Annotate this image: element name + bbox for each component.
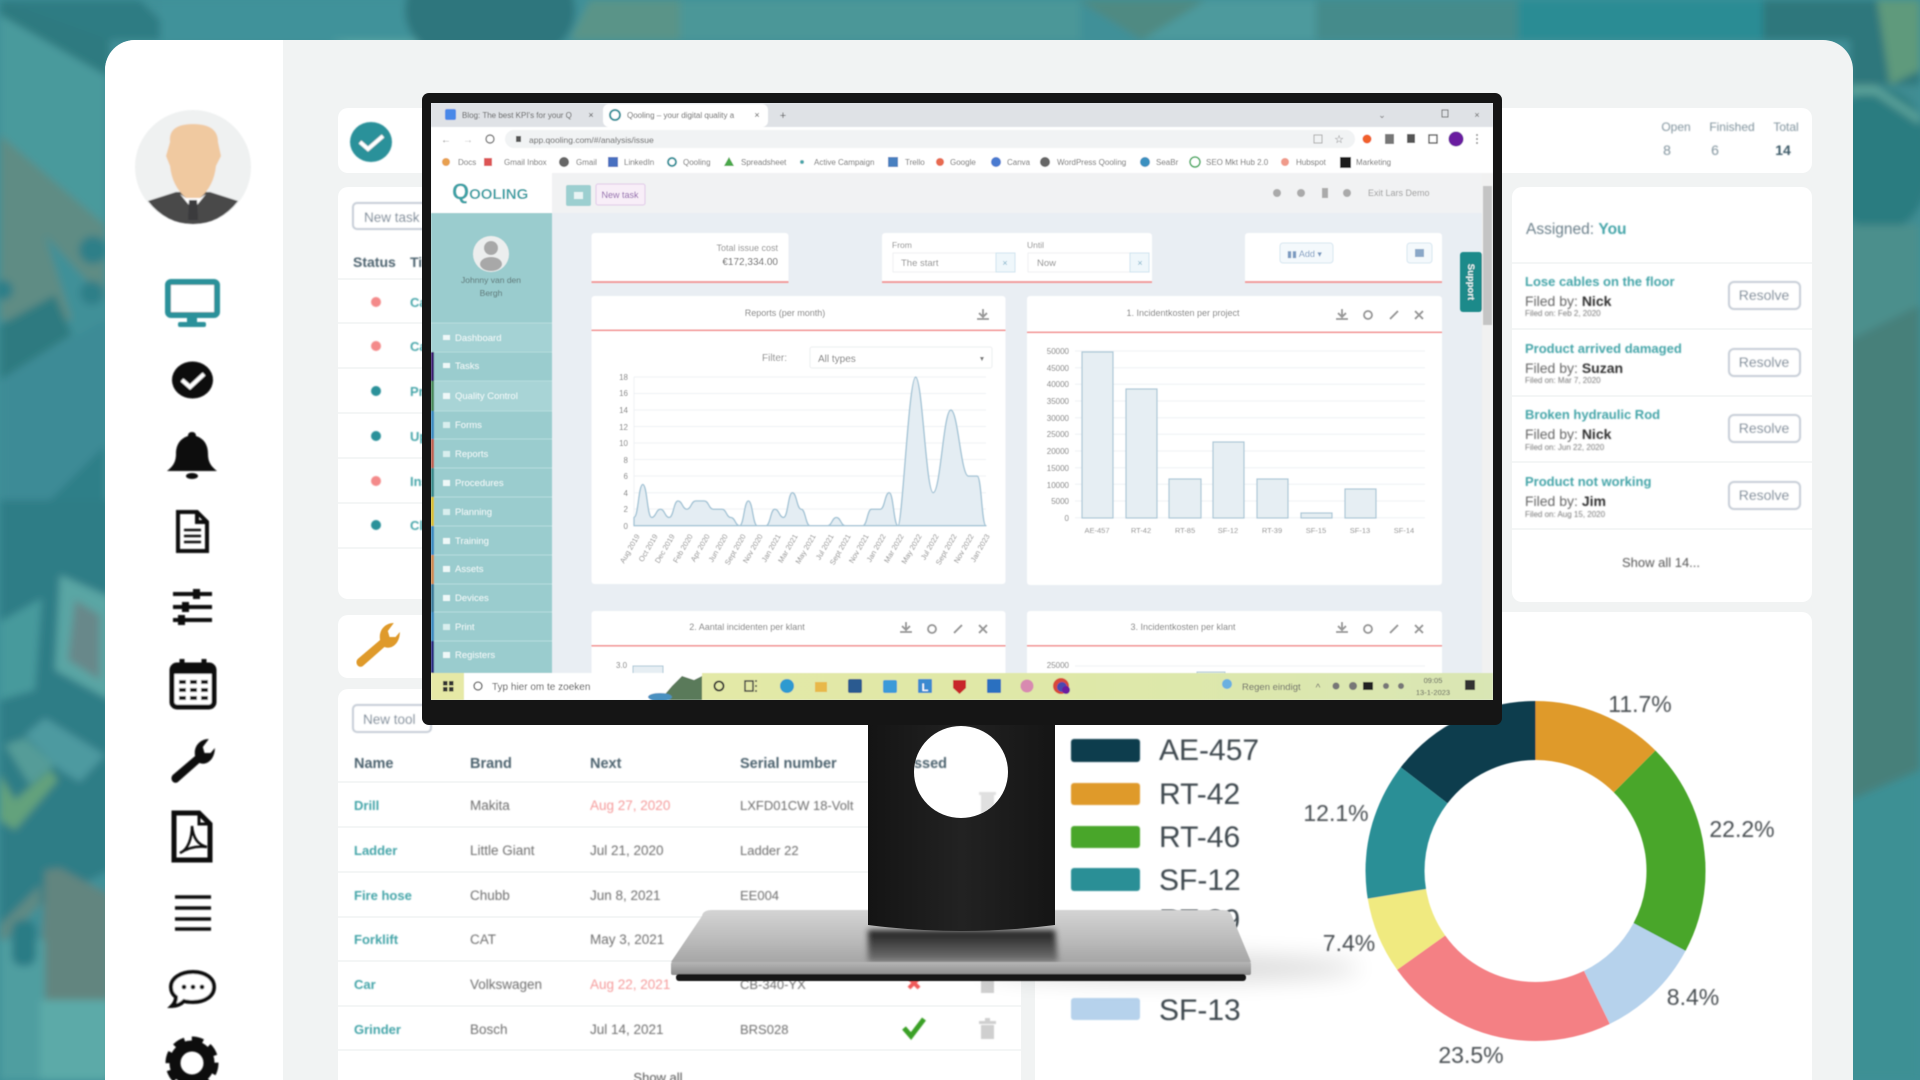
date filter card	[882, 233, 1152, 283]
browser tab bar: ⌄	[1378, 110, 1386, 120]
donut percentages: 8.4%	[1667, 984, 1719, 1010]
new task button: New task	[364, 210, 420, 225]
line chart: 18	[619, 373, 629, 382]
line chart: 12	[619, 423, 629, 432]
issue 3: Resolve	[1739, 420, 1789, 436]
chart panel: costs per client: 3. Incidentkosten per klant	[1130, 622, 1236, 632]
windows taskbar: L	[922, 682, 929, 694]
sidebar avatar	[135, 110, 251, 224]
bar chart: SF-14	[1394, 526, 1414, 535]
app sidebar: Planning	[455, 507, 492, 518]
next dates: Aug 27, 2020	[590, 798, 670, 813]
header actions	[1273, 188, 1351, 198]
task counters: 6	[1711, 142, 1719, 158]
icon: task check	[350, 122, 392, 162]
app sidebar: Training	[455, 536, 489, 547]
tool names	[354, 798, 412, 1037]
panel: tools table	[338, 689, 1021, 1080]
app header: Exit Lars Demo	[1368, 188, 1430, 198]
issue 4: Filed on: Aug 15, 2020	[1525, 510, 1606, 519]
line chart: Oct 2019	[637, 532, 660, 563]
bar chart: 10000	[1047, 481, 1070, 490]
line chart: 6	[624, 472, 629, 481]
legend	[1071, 734, 1259, 1027]
icon: wrench	[171, 739, 215, 783]
tool brands: Little Giant	[470, 843, 535, 858]
date filter card: ×	[1002, 258, 1008, 268]
legend: SF-12	[1159, 864, 1241, 897]
windows taskbar: 13-1-2023	[1416, 688, 1450, 697]
total cost card: €172,334.00	[722, 257, 778, 268]
donut percentages: 11.7%	[1608, 691, 1672, 717]
browser tab bar: Qooling – your digital quality a	[627, 111, 735, 120]
chart panel: costs per project: 1. Incidentkosten per project	[1126, 308, 1240, 318]
bar chart: AE-457	[1084, 526, 1110, 535]
tools column headers: Brand	[470, 756, 512, 772]
issue 3: Filed on: Jun 22, 2020	[1525, 443, 1605, 452]
legend: RT-42	[1159, 778, 1240, 811]
panel: icon sidebar	[105, 40, 283, 1080]
serial numbers: BRS028	[740, 1022, 788, 1037]
line chart: Nov 2021	[847, 532, 871, 565]
bar chart: RT-42	[1131, 526, 1151, 535]
bar chart: 20000	[1047, 447, 1070, 456]
next dates: Jun 8, 2021	[590, 888, 661, 903]
browser bookmarks bar: Qooling	[683, 158, 711, 167]
donut	[1395, 730, 1676, 1012]
new task button	[353, 203, 463, 229]
app sidebar: Quality Control	[455, 391, 518, 402]
tool brands: Volkswagen	[470, 977, 542, 992]
tool brands: Makita	[470, 798, 510, 813]
task rows: Cables	[410, 295, 453, 310]
new tool button	[353, 705, 431, 732]
icon: chat	[171, 972, 214, 1006]
browser bookmarks bar: Docs	[458, 158, 476, 167]
browser tab bar: ×	[1474, 110, 1480, 120]
task rows: Update	[410, 429, 454, 444]
line chart: Mar 2022	[882, 532, 906, 564]
chart panel: reports per month	[592, 296, 1006, 584]
issue 4: Filed by: Jim	[1525, 493, 1606, 509]
app header: New task	[601, 190, 639, 200]
bar chart: 35000	[1047, 397, 1070, 406]
task counters: Open	[1661, 120, 1691, 134]
base shadow	[980, 956, 1360, 980]
stand base	[671, 910, 1251, 981]
windows taskbar	[431, 673, 1493, 701]
bar chart: SF-12	[1218, 526, 1238, 535]
browser tab bar	[431, 103, 1493, 127]
add widget card	[1245, 233, 1442, 283]
date filter card: From	[892, 240, 912, 250]
serial numbers: EE004	[740, 888, 779, 903]
next dates	[590, 798, 670, 1037]
bar chart: SF-13	[1350, 526, 1370, 535]
tool names: Forklift	[354, 932, 399, 947]
browser bookmarks bar: Active Campaign	[814, 158, 874, 167]
app sidebar: Johnny van den	[461, 275, 521, 285]
chart panel: costs per project	[1027, 296, 1442, 585]
line chart: Jan 2023	[969, 532, 992, 564]
legend: SF-13	[1159, 994, 1241, 1027]
bar chart: 45000	[1047, 364, 1070, 373]
tool brands: CAT	[470, 932, 496, 947]
line chart: Jul 2021	[814, 532, 836, 562]
chart panel: costs per client: 25000	[1047, 661, 1070, 670]
browser bookmarks bar: WordPress Qooling	[1057, 158, 1126, 167]
hole in stand: Passed	[896, 756, 947, 772]
browser address bar: ☆	[1334, 134, 1344, 146]
app sidebar: Procedures	[455, 478, 504, 489]
scrollbar	[1481, 186, 1492, 326]
line chart: Sept 2020	[723, 532, 748, 567]
task counters: Total	[1773, 120, 1799, 134]
next dates: Aug 22, 2021	[590, 977, 670, 992]
date filter card: Until	[1027, 240, 1044, 250]
line chart: 16	[619, 389, 629, 398]
browser bookmarks bar	[431, 150, 1493, 173]
chart panel: reports per month: ▼	[979, 356, 985, 363]
issue 2: Resolve	[1739, 354, 1789, 370]
line chart: Apr 2020	[689, 532, 712, 563]
issue 1: Filed on: Feb 2, 2020	[1525, 309, 1601, 318]
bar chart: 50000	[1047, 347, 1070, 356]
tool brands: Bosch	[470, 1022, 508, 1037]
line chart: Jan 2021	[760, 532, 783, 564]
donut percentages: 12.1%	[1303, 800, 1369, 826]
line chart: 14	[619, 406, 629, 415]
icon: calendar	[172, 659, 214, 707]
line chart: 4	[624, 489, 629, 498]
donut percentages: 22.2%	[1709, 816, 1775, 842]
task counters	[1661, 120, 1799, 158]
browser tab bar: +	[780, 110, 786, 122]
issue 3	[1525, 407, 1800, 452]
task counters: 14	[1775, 142, 1791, 158]
icon: document	[178, 512, 207, 551]
browser address bar	[431, 127, 1493, 150]
app sidebar: Tasks	[455, 361, 480, 372]
tools column headers: Next	[590, 756, 622, 772]
line chart: May 2022	[899, 532, 924, 566]
date filter card: ×	[1137, 258, 1143, 268]
date filter card: The start	[901, 258, 939, 269]
line chart: Aug 2019	[618, 532, 642, 565]
issue 1: Lose cables on the floor	[1525, 274, 1675, 289]
task table header: Status	[353, 254, 396, 270]
task counters: 8	[1663, 142, 1671, 158]
app sidebar: Devices	[455, 593, 489, 604]
bar chart	[1047, 347, 1425, 535]
hole in stand	[914, 726, 1008, 818]
browser bookmarks bar: Gmail	[576, 158, 597, 167]
donut percentages: 7.4%	[1323, 930, 1375, 956]
monitor screen	[431, 103, 1493, 701]
app sidebar	[431, 213, 552, 673]
tool names: Grinder	[354, 1022, 401, 1037]
line chart: May 2021	[793, 532, 818, 566]
browser bookmarks bar: LinkedIn	[624, 158, 654, 167]
panel: donut chart	[1035, 612, 1812, 1080]
task rows: Inspect	[410, 474, 456, 489]
right strip shapes	[1850, 0, 1920, 90]
windows taskbar: Regen eindigt	[1242, 682, 1301, 693]
browser tab bar: ×	[754, 110, 760, 120]
qooling logo: QOOLING	[452, 179, 528, 204]
monitor frame	[422, 93, 1502, 725]
issue 2: Product arrived damaged	[1525, 341, 1682, 356]
chart panel: incidents per client: 2. Aantal incidenten per klant	[689, 622, 805, 632]
browser bookmarks bar: Spreadsheet	[741, 158, 787, 167]
serial numbers: LXFD01CW 18-Volt	[740, 798, 854, 813]
chart panel: incidents per client	[591, 611, 1006, 674]
line chart: 8	[624, 456, 629, 465]
donut percentages	[1303, 691, 1775, 1068]
serial numbers	[740, 798, 854, 1037]
browser tab bar: ×	[588, 110, 594, 120]
bar chart: 0	[1065, 514, 1070, 523]
tool names: Ladder	[354, 843, 397, 858]
search photo	[648, 676, 702, 701]
app sidebar: Forms	[455, 420, 482, 431]
new tool button: New tool	[363, 712, 416, 727]
total cost card: Total issue cost	[716, 243, 778, 253]
tool names: Drill	[354, 798, 379, 813]
browser bookmarks bar: Marketing	[1356, 158, 1391, 167]
bar chart: 5000	[1051, 497, 1070, 506]
bar chart: 40000	[1047, 380, 1070, 389]
chart panel: reports per month: Filter:	[762, 353, 787, 364]
show all issues: Show all 14...	[1622, 555, 1700, 570]
line chart: 0	[624, 522, 629, 531]
line chart: Mar 2021	[776, 532, 800, 564]
legend: RT-46	[1159, 821, 1240, 854]
line chart: Jun 2020	[707, 532, 730, 564]
bar chart: 30000	[1047, 414, 1070, 423]
passed status icons	[904, 978, 924, 1036]
support tab	[1460, 252, 1482, 312]
next dates: Jul 14, 2021	[590, 1022, 664, 1037]
browser bookmarks bar: Canva	[1007, 158, 1031, 167]
panel: tools header	[338, 615, 1038, 678]
issue 2: Filed on: Mar 7, 2020	[1525, 376, 1601, 385]
icon: monitor (active)	[168, 282, 217, 327]
line chart: Sept 2022	[934, 532, 959, 567]
line chart	[618, 373, 992, 567]
issue 3: Broken hydraulic Rod	[1525, 407, 1660, 422]
task rows: Product	[410, 384, 460, 399]
icon: sliders	[173, 589, 212, 625]
icon: pdf	[174, 813, 210, 860]
next dates: Jul 21, 2020	[590, 843, 664, 858]
app header	[431, 173, 1493, 213]
app sidebar: Assets	[455, 564, 484, 575]
tools column headers	[354, 756, 837, 772]
stand neck	[868, 725, 1055, 931]
new task pill	[596, 184, 645, 205]
issue 3: Filed by: Nick	[1525, 426, 1612, 442]
browser bookmarks bar: Google	[950, 158, 976, 167]
panel: tasks header	[338, 108, 1812, 173]
line chart: Feb 2020	[671, 532, 695, 564]
support tab: Support	[1465, 264, 1476, 301]
monitor stand	[671, 725, 1360, 981]
tool brands	[470, 798, 542, 1037]
top strip shapes	[0, 0, 180, 40]
line chart: Jul 2022	[919, 532, 941, 562]
task rows: Cables	[410, 339, 453, 354]
app sidebar: Print	[455, 622, 475, 633]
menu button	[566, 185, 591, 206]
total cost card	[592, 233, 788, 283]
browser bookmarks bar: SEO Mkt Hub 2.0	[1206, 158, 1269, 167]
app sidebar: Bergh	[480, 288, 503, 298]
chart panel: incidents per client: 3.0	[616, 661, 628, 670]
panel: assigned issues	[1512, 187, 1812, 602]
chart panel: reports per month: Reports (per month)	[745, 308, 825, 318]
browser tab bar: Blog: The best KPI's for your Q	[462, 111, 572, 120]
windows taskbar: ^	[1316, 683, 1321, 694]
bar chart: SF-15	[1306, 526, 1326, 535]
assigned heading: Assigned: You	[1526, 221, 1627, 238]
line chart: Nov 2020	[741, 532, 765, 565]
browser address bar: app.qooling.com/#/analysis/issue	[529, 135, 654, 145]
issue 4: Resolve	[1739, 487, 1789, 503]
app sidebar: Dashboard	[455, 333, 501, 344]
icon: orange wrench	[356, 623, 400, 667]
sidebar navigation icons	[167, 282, 217, 1080]
icon: gear	[169, 1040, 215, 1080]
line chart: 10	[619, 439, 629, 448]
issue 1: Filed by: Nick	[1525, 293, 1612, 309]
browser address bar: →	[463, 135, 473, 146]
tool brands: Chubb	[470, 888, 510, 903]
serial numbers: Ladder 22	[740, 843, 799, 858]
bar chart: 15000	[1047, 464, 1070, 473]
donut percentages: 23.5%	[1438, 1042, 1504, 1068]
issue 1	[1525, 274, 1800, 318]
issue 2: Filed by: Suzan	[1525, 360, 1623, 376]
icon: list	[175, 897, 211, 929]
issue 1: Resolve	[1739, 287, 1789, 303]
add widget card: ▮▮ Add ▾	[1287, 249, 1322, 259]
chart panel: costs per client	[1026, 611, 1442, 674]
icon: check circle	[172, 362, 213, 398]
next dates: May 3, 2021	[590, 932, 664, 947]
issue 4: Product not working	[1525, 474, 1651, 489]
task table header: Title	[410, 254, 439, 270]
legend: RT-39	[1159, 904, 1240, 937]
browser bookmarks bar: Gmail Inbox	[504, 158, 547, 167]
panel: task list	[338, 187, 1038, 599]
tool names: Fire hose	[354, 888, 412, 903]
icon: bell	[167, 432, 217, 479]
legend: AE-457	[1159, 734, 1259, 767]
chart panel: reports per month: All types	[818, 354, 856, 365]
windows taskbar: 09:05	[1424, 676, 1442, 685]
bar chart: 25000	[1047, 430, 1070, 439]
line chart: Sept 2021	[828, 532, 853, 567]
issue 4	[1525, 474, 1800, 519]
date filter card: Now	[1037, 258, 1056, 269]
serial numbers: CB-340-YX	[740, 977, 806, 992]
browser bookmarks bar: Trello	[905, 158, 925, 167]
app sidebar: Reports	[455, 449, 489, 460]
windows taskbar: Typ hier om te zoeken	[492, 682, 590, 693]
app sidebar: Registers	[455, 650, 495, 661]
task counters: Finished	[1709, 120, 1755, 134]
line chart: Jan 2022	[865, 532, 888, 564]
browser bookmarks bar: SeaBr	[1156, 158, 1179, 167]
tools column headers: Serial number	[740, 756, 837, 772]
trash icons	[979, 978, 996, 1039]
line chart: 2	[624, 505, 629, 514]
line chart: Nov 2022	[952, 532, 976, 565]
tool names: Car	[354, 977, 376, 992]
task table header	[353, 254, 439, 270]
task rows: Clean	[410, 518, 445, 533]
issue 2	[1525, 341, 1800, 385]
line chart: Dec 2019	[653, 532, 677, 565]
tools column headers: Name	[354, 756, 394, 772]
bar chart: RT-39	[1262, 526, 1282, 535]
browser bookmarks bar: Hubspot	[1296, 158, 1327, 167]
browser address bar: ←	[441, 135, 451, 146]
task rows	[371, 295, 460, 533]
bar chart: RT-85	[1175, 526, 1195, 535]
